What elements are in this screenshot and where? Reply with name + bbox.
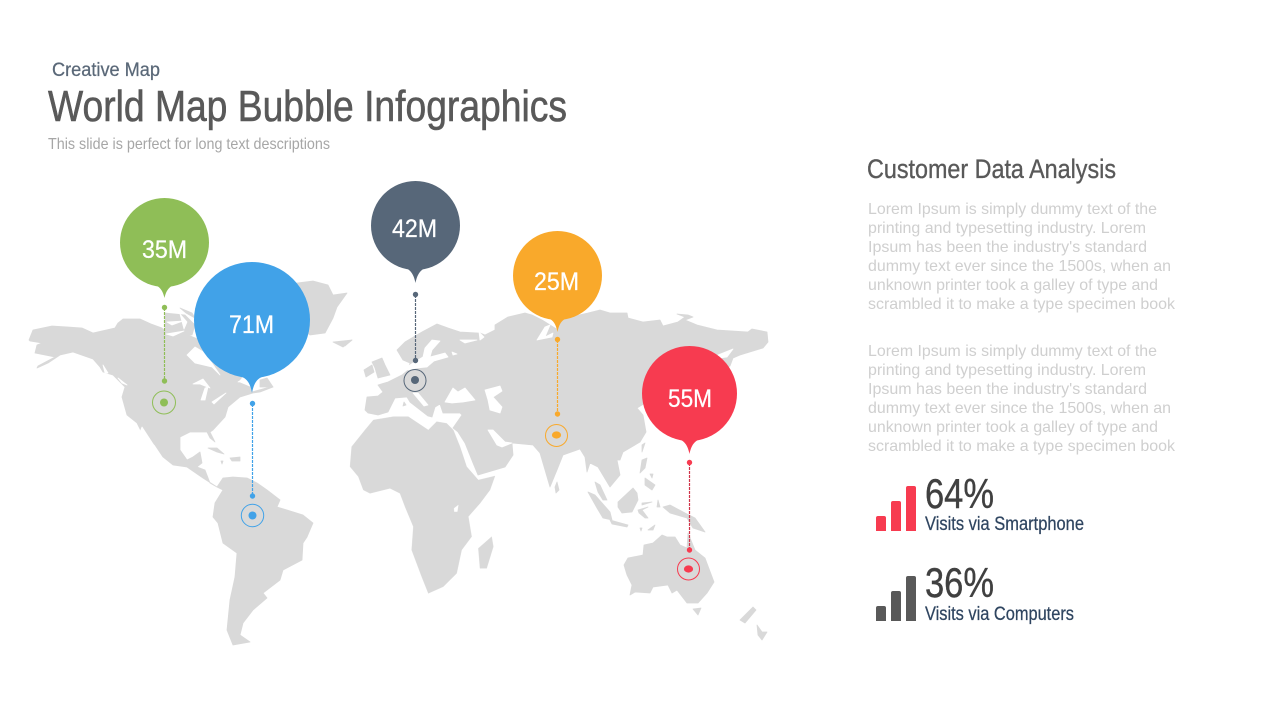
paragraph 1 xyxy=(868,201,1176,313)
paragraph 1: printing and typesetting industry. Lorem xyxy=(868,220,1146,237)
pin: 71M xyxy=(194,262,310,527)
stat: computers xyxy=(876,559,1074,625)
connector dots xyxy=(413,292,418,363)
paragraph 1: Lorem Ipsum is simply dummy text of the xyxy=(868,201,1157,218)
target marker xyxy=(152,391,176,414)
connector dots xyxy=(250,401,255,499)
stat label: Visits via Computers xyxy=(925,604,1074,625)
bubble xyxy=(194,262,310,378)
bubble tip xyxy=(146,283,182,298)
paragraph 1: unknown printer took a galley of type and xyxy=(868,277,1158,294)
bubble tip xyxy=(672,438,708,454)
target marker xyxy=(678,558,700,580)
connector dots xyxy=(555,337,560,417)
connector xyxy=(164,308,166,381)
stat label: Visits via Smartphone xyxy=(925,514,1084,535)
subtitle: This slide is perfect for long text descriptions xyxy=(48,136,330,153)
icon: grey signal bars xyxy=(876,576,916,621)
connector xyxy=(556,340,558,414)
south-east asia islands xyxy=(555,458,705,532)
panel: customer data analysis xyxy=(867,154,1176,625)
africa and madagascar xyxy=(350,417,495,593)
eurasia xyxy=(345,310,768,487)
value: 35M xyxy=(142,236,187,264)
value: 25M xyxy=(534,268,579,296)
target marker xyxy=(404,370,426,392)
eyebrow: Creative Map xyxy=(52,60,160,81)
paragraph 2 xyxy=(868,343,1176,455)
bubble xyxy=(513,231,602,320)
header xyxy=(48,60,567,153)
australia and new zealand xyxy=(624,533,767,640)
icon: red signal bars xyxy=(876,486,916,531)
paragraph 2: dummy text ever since the 1500s, when an xyxy=(868,400,1171,417)
world map xyxy=(29,281,768,645)
pin: 42M xyxy=(371,181,460,392)
paragraph 2: printing and typesetting industry. Lorem xyxy=(868,362,1146,379)
south america xyxy=(213,477,313,645)
pin: 55M xyxy=(642,346,737,580)
value: 42M xyxy=(392,215,437,243)
pin: 25M xyxy=(513,231,602,446)
percentage: 36% xyxy=(925,559,994,606)
paragraph 2: scrambled it to make a type specimen book xyxy=(868,438,1176,455)
target marker xyxy=(546,424,568,446)
paragraph 2: Lorem Ipsum is simply dummy text of the xyxy=(868,343,1157,360)
value: 71M xyxy=(229,311,274,339)
value: 55M xyxy=(668,385,712,413)
paragraph 2: unknown printer took a galley of type and xyxy=(868,419,1158,436)
paragraph 1: Ipsum has been the industry's standard xyxy=(868,239,1147,256)
bubble xyxy=(120,198,209,287)
bubble xyxy=(642,346,737,441)
greenland, iceland, caribbean islands xyxy=(208,281,352,464)
percentage: 64% xyxy=(925,470,994,517)
pin: 35M xyxy=(120,198,209,414)
target marker xyxy=(241,504,264,527)
connector xyxy=(414,295,416,360)
connector xyxy=(688,463,690,550)
bubble tip xyxy=(540,316,576,332)
north america xyxy=(29,308,273,487)
bubble xyxy=(371,181,460,270)
connector dots xyxy=(162,305,167,384)
panel heading: Customer Data Analysis xyxy=(867,154,1116,184)
paragraph 2: Ipsum has been the industry's standard xyxy=(868,381,1147,398)
paragraph 1: dummy text ever since the 1500s, when an xyxy=(868,258,1171,275)
bubble tip xyxy=(234,375,270,393)
bubble tip xyxy=(398,266,434,283)
connector dots xyxy=(687,460,692,553)
stat: smartphone xyxy=(876,470,1084,535)
paragraph 1: scrambled it to make a type specimen book xyxy=(868,296,1176,313)
title: World Map Bubble Infographics xyxy=(48,82,567,131)
connector xyxy=(252,404,254,496)
